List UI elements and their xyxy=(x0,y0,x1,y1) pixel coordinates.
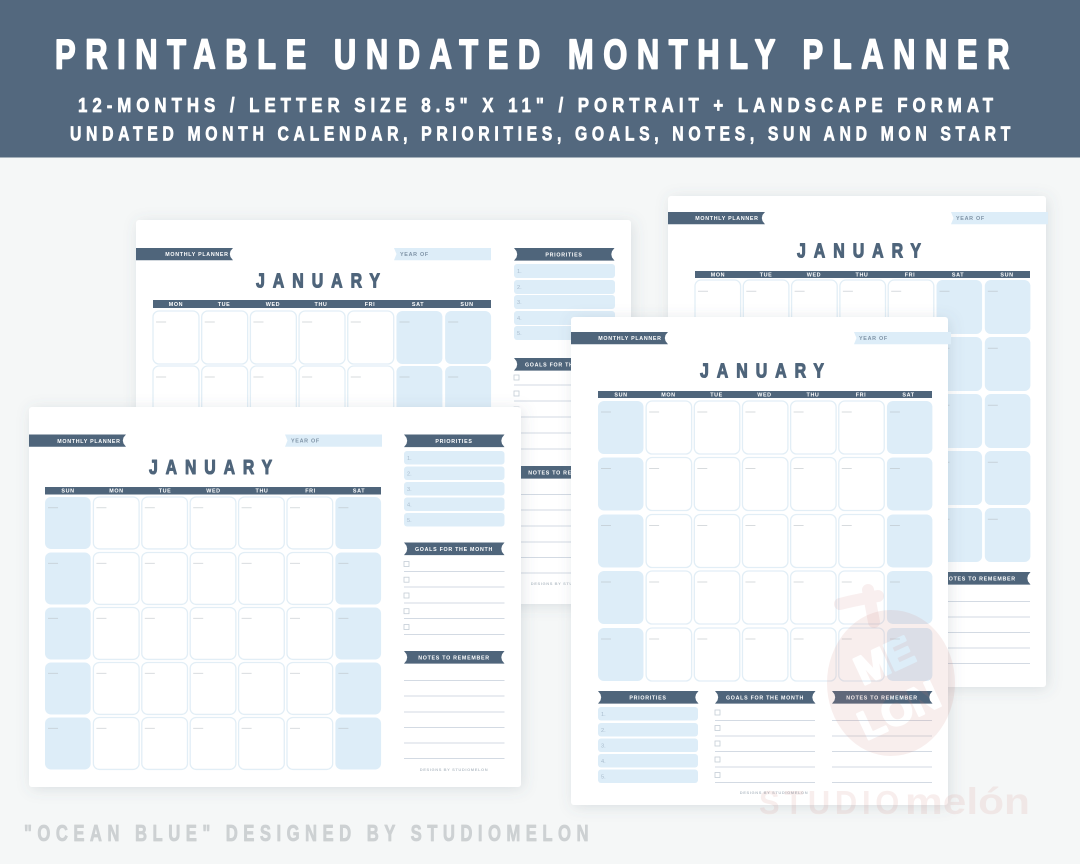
header banner xyxy=(0,0,1080,158)
calendar grid xyxy=(45,497,381,769)
panel: back right portrait page xyxy=(668,196,1048,687)
weekday bar: FRI xyxy=(856,392,866,398)
priorities list: 4. xyxy=(517,316,522,322)
goals checklist xyxy=(514,375,615,449)
weekday bar: WED xyxy=(757,392,772,398)
year of box: YEAR OF xyxy=(956,216,985,222)
weekday bar: TUE xyxy=(218,302,230,308)
weekday bar: FRI xyxy=(365,302,375,308)
calendar grid xyxy=(695,280,1030,562)
year of box xyxy=(394,248,491,260)
weekday bar: SAT xyxy=(952,272,964,278)
ribbon: notes to remember xyxy=(404,651,504,664)
watermark: melon logo xyxy=(827,590,955,756)
watermark: studio melon wordmark: STUDIO xyxy=(759,784,904,821)
ribbon: monthly planner xyxy=(571,332,668,344)
weekday bar: MON xyxy=(711,272,725,278)
weekday bar xyxy=(598,391,932,398)
weekday bar: MON xyxy=(661,392,676,398)
weekday bar: TUE xyxy=(159,489,171,495)
weekday bar xyxy=(695,271,1030,278)
priorities list: 3. xyxy=(601,744,606,750)
weekday bar: SAT xyxy=(902,392,915,398)
panel: back left landscape page xyxy=(136,220,631,604)
priorities list xyxy=(404,451,504,526)
weekday bar: WED xyxy=(266,302,280,308)
ribbon: goals for the month xyxy=(514,358,614,371)
footer caption: "OCEAN BLUE" DESIGNED BY STUDIOMELON xyxy=(24,820,594,846)
month heading: JANUARY xyxy=(700,360,832,382)
note lines xyxy=(514,494,615,573)
weekday bar: MON xyxy=(109,489,124,495)
goals checklist xyxy=(715,710,815,782)
ribbon: monthly planner: MONTHLY PLANNER xyxy=(695,216,759,222)
weekday bar: THU xyxy=(315,302,327,308)
priorities list: 5. xyxy=(407,518,412,524)
ribbon: priorities: PRIORITIES xyxy=(629,695,667,701)
panel: front left landscape page xyxy=(29,407,521,787)
ribbon: notes to remember xyxy=(514,466,614,479)
ribbon: priorities: PRIORITIES xyxy=(435,439,473,445)
weekday bar: SUN xyxy=(61,489,75,495)
priorities list: 2. xyxy=(407,472,412,478)
priorities list: 3. xyxy=(407,487,412,493)
weekday bar: SAT xyxy=(353,489,365,495)
ribbon: priorities xyxy=(598,691,698,704)
ribbon: monthly planner: MONTHLY PLANNER xyxy=(165,252,229,258)
ribbon: goals for the month xyxy=(404,542,504,555)
ribbon: priorities xyxy=(514,248,614,261)
year of box: YEAR OF xyxy=(291,439,320,445)
credit: DESIGNS BY STUDIOMELON xyxy=(420,767,488,772)
ribbon: goals for the month: GOALS FOR THE MONTH xyxy=(726,695,804,701)
panel: front right portrait page xyxy=(571,317,951,805)
ribbon: priorities xyxy=(404,434,504,447)
weekday bar: SUN xyxy=(614,392,628,398)
priorities list: 1. xyxy=(407,456,412,462)
priorities list: 4. xyxy=(601,759,606,765)
ribbon: monthly planner: MONTHLY PLANNER xyxy=(598,336,662,342)
ribbon: monthly planner xyxy=(136,248,233,260)
ribbon: notes to remember: NOTES TO REMEMBER xyxy=(528,470,600,476)
year of box: YEAR OF xyxy=(400,252,429,258)
note lines xyxy=(832,720,932,782)
calendar grid xyxy=(598,401,932,681)
ribbon: monthly planner: MONTHLY PLANNER xyxy=(57,439,121,445)
ribbon: monthly planner xyxy=(29,434,126,447)
weekday bar xyxy=(153,300,491,308)
priorities list xyxy=(514,264,615,340)
weekday bar: THU xyxy=(856,272,868,278)
month heading: JANUARY xyxy=(256,270,388,292)
month heading: JANUARY xyxy=(149,457,280,479)
weekday bar: THU xyxy=(807,392,819,398)
goals checklist xyxy=(404,562,504,634)
ribbon: notes to remember xyxy=(832,691,932,704)
credit: DESIGNS BY STUDIOMELON xyxy=(740,790,808,795)
priorities list xyxy=(598,707,698,783)
ribbon: goals for the month: GOALS FOR THE MONTH xyxy=(525,362,603,368)
priorities list: 3. xyxy=(517,300,522,306)
priorities list: 5. xyxy=(601,774,606,780)
year of box: YEAR OF xyxy=(859,336,888,342)
ribbon: goals for the month xyxy=(715,691,816,704)
weekday bar: TUE xyxy=(710,392,723,398)
weekday bar: SUN xyxy=(460,302,474,308)
watermark: studio melon wordmark: melón xyxy=(905,781,1030,822)
weekday bar: SAT xyxy=(412,302,424,308)
priorities list: 1. xyxy=(517,269,522,275)
weekday bar: TUE xyxy=(760,272,772,278)
note lines xyxy=(404,680,504,758)
priorities list: 2. xyxy=(601,728,606,734)
credit: DESIGNS BY STUDIOMELON xyxy=(531,581,599,586)
weekday bar xyxy=(45,487,381,495)
priorities list: 4. xyxy=(407,502,412,508)
weekday bar: FRI xyxy=(905,272,915,278)
weekday bar: THU xyxy=(256,489,268,495)
calendar grid xyxy=(153,311,491,419)
ribbon: goals for the month: GOALS FOR THE MONTH xyxy=(415,547,493,553)
year of box xyxy=(285,434,382,447)
weekday bar: WED xyxy=(807,272,821,278)
ribbon: monthly planner xyxy=(668,212,765,224)
weekday bar: WED xyxy=(206,489,221,495)
ribbon: priorities: PRIORITIES xyxy=(545,252,583,258)
priorities list: 1. xyxy=(601,712,606,718)
weekday bar: FRI xyxy=(305,489,316,495)
ribbon: notes to remember: NOTES TO REMEMBER xyxy=(846,695,918,701)
ribbon: notes to remember: NOTES TO REMEMBER xyxy=(418,655,490,661)
month heading: JANUARY xyxy=(797,240,929,262)
watermark: studio melon wordmark xyxy=(759,781,1030,822)
note lines xyxy=(930,602,1030,664)
weekday bar: MON xyxy=(169,302,183,308)
priorities list: 2. xyxy=(517,285,522,291)
weekday bar: SUN xyxy=(1000,272,1014,278)
year of box xyxy=(854,332,951,344)
ribbon: notes to remember xyxy=(930,572,1030,585)
priorities list: 5. xyxy=(517,331,522,337)
year of box xyxy=(951,212,1048,224)
ribbon: notes to remember: NOTES TO REMEMBER xyxy=(944,576,1016,582)
